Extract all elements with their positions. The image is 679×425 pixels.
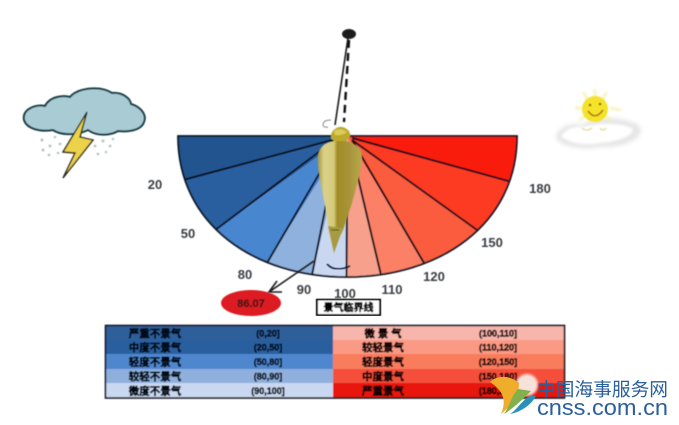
legend: boom labels: (150,180] bbox=[479, 372, 517, 382]
scale labels: 120 bbox=[423, 269, 445, 284]
legend: downturn labels: 微度不景气 bbox=[129, 384, 182, 398]
pendulum pin bbox=[342, 29, 356, 39]
threshold label box: 景气临界线 bbox=[324, 301, 374, 314]
legend: boom labels bbox=[362, 327, 517, 398]
legend: boom rows bbox=[333, 326, 565, 398]
scale labels: 150 bbox=[481, 235, 503, 250]
sun rays bbox=[576, 90, 620, 120]
scale labels: 180 bbox=[529, 181, 551, 196]
legend: boom labels: (110,120] bbox=[479, 342, 517, 352]
watermark text: cnss.com.cn bbox=[537, 395, 668, 420]
legend: boom labels: (180,200] bbox=[479, 386, 517, 396]
scale labels: 20 bbox=[148, 177, 162, 192]
legend: boom labels: 中度景气 bbox=[362, 370, 404, 383]
legend: downturn labels: (90,100] bbox=[251, 386, 285, 396]
scale labels: 50 bbox=[181, 226, 195, 241]
legend: downturn labels: (0,20] bbox=[256, 328, 280, 338]
arrow to current value bbox=[269, 261, 314, 292]
legend: boom labels: 轻度景气 bbox=[362, 356, 404, 368]
pendulum string bbox=[335, 38, 348, 125]
legend: boom labels: (100,110] bbox=[479, 328, 517, 338]
small arc marker bbox=[327, 264, 350, 269]
threshold label box bbox=[317, 300, 380, 315]
legend: downturn labels: (80,90] bbox=[254, 372, 282, 382]
scale labels: 80 bbox=[238, 267, 252, 282]
current value badge bbox=[221, 290, 281, 316]
legend: downturn labels: (20,50] bbox=[254, 342, 282, 352]
legend: downturn rows bbox=[106, 326, 333, 398]
legend: downturn labels: 较轻不景气 bbox=[129, 370, 182, 383]
sun face bbox=[582, 96, 608, 130]
plumb bob knob bbox=[331, 127, 350, 141]
legend: downturn labels: 中度不景气 bbox=[129, 341, 182, 354]
semicircular gauge dial bbox=[176, 134, 519, 279]
legend: downturn labels bbox=[129, 327, 285, 398]
legend: downturn labels: 严重不景气 bbox=[129, 327, 182, 340]
legend: downturn labels: 轻度不景气 bbox=[129, 356, 182, 368]
watermark text bbox=[537, 379, 668, 420]
icon: storm cloud with lightning bbox=[24, 88, 145, 178]
scale labels: 100 bbox=[334, 286, 356, 301]
white cloud bbox=[556, 118, 641, 148]
rain dots bbox=[40, 136, 114, 156]
lightning bolt bbox=[63, 112, 93, 178]
dial spokes bbox=[183, 138, 512, 277]
legend: boom labels: (120,150] bbox=[479, 357, 517, 367]
legend table bbox=[106, 326, 565, 398]
legend: boom labels: 较轻景气 bbox=[362, 341, 404, 354]
scale labels bbox=[148, 177, 551, 301]
legend: boom labels: 严重景气 bbox=[362, 384, 404, 398]
plumb bob body bbox=[318, 141, 362, 253]
dashed vertical reference bbox=[344, 40, 349, 122]
scale labels: 90 bbox=[297, 282, 311, 297]
dial outline bbox=[178, 136, 517, 277]
plumb bob pendulum bbox=[318, 29, 362, 253]
watermark logo bbox=[490, 374, 538, 414]
current value badge: 86.07 bbox=[237, 298, 265, 310]
legend: downturn labels: (50,80] bbox=[254, 357, 282, 367]
storm cloud bbox=[24, 88, 145, 135]
scale labels: 110 bbox=[382, 282, 402, 297]
legend: boom labels: 微 景 气 bbox=[364, 327, 402, 340]
icon: smiling sun on cloud bbox=[556, 90, 641, 148]
watermark text: 中国海事服务网 bbox=[537, 379, 668, 400]
